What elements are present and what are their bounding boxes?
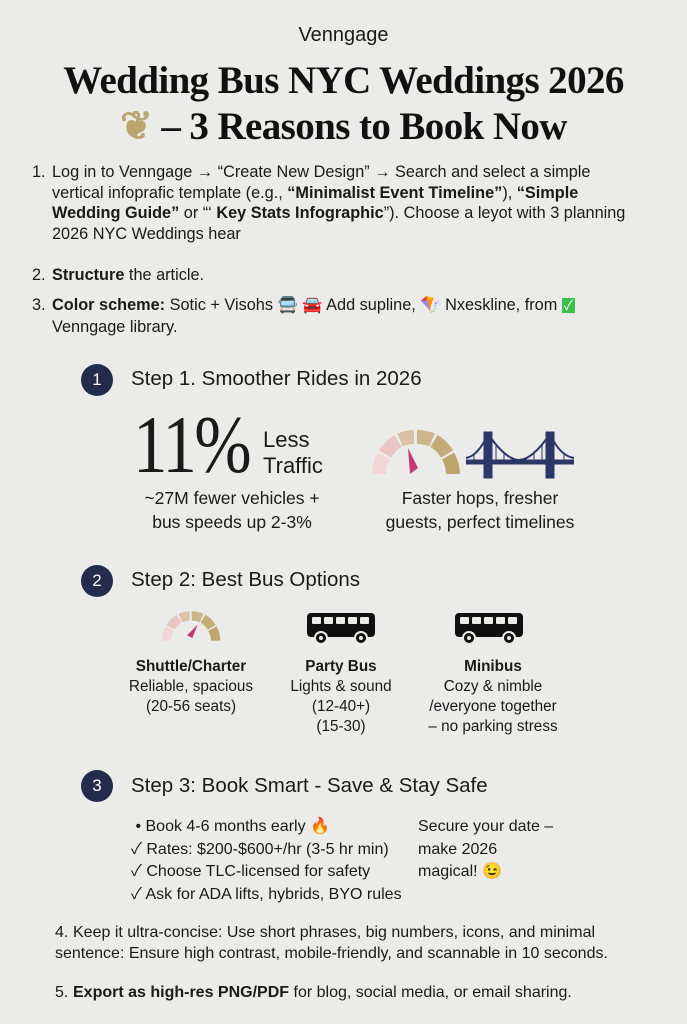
- list item 1: Log in to Venngage → “Create New Design” → Search and select a simple: [52, 163, 590, 181]
- list item 1: vertical infoprafic template (e.g., “Minimalist Event Timeline”), “Simple: [52, 184, 578, 202]
- list item 3: Color scheme: Sotic + Visohs 🚍 🚘 Add supline, 🪁 Nxeskline, from ✓: [52, 296, 573, 314]
- icon: minibus: [455, 613, 523, 643]
- title: Wedding Bus NYC Weddings 2026: [63, 59, 624, 102]
- text: 3.: [32, 296, 46, 314]
- list item 3: [32, 296, 575, 336]
- checklist: ✓ Choose TLC-licensed for safety: [131, 863, 370, 880]
- option: party bus: Party Bus: [305, 658, 377, 675]
- list item 3: Venngage library.: [52, 318, 178, 336]
- bridge caption: Faster hops, fresher: [402, 488, 558, 508]
- step 1 heading: Step 1. Smoother Rides in 2026: [131, 367, 422, 390]
- icon: bridge: [466, 432, 574, 478]
- list item 4: Keep it ultra-concise: Use short phrases, big numbers, icons, and minimal: [73, 924, 595, 941]
- callout: Secure your date –: [418, 818, 553, 835]
- big stat 11%: 11%: [133, 399, 249, 490]
- title: [63, 59, 624, 148]
- list item 4: 4.: [55, 924, 68, 941]
- checklist: • Book 4-6 months early 🔥: [135, 818, 330, 835]
- stat caption: ~27M fewer vehicles +: [144, 488, 320, 508]
- checklist: [131, 816, 402, 902]
- bridge caption: guests, perfect timelines: [386, 512, 574, 532]
- icon: small gauge: [162, 611, 220, 641]
- option: shuttle: [129, 658, 253, 715]
- list item 2: Structure the article.: [52, 266, 204, 284]
- text: 2.: [32, 266, 46, 284]
- step 2 badge: 2: [92, 571, 102, 590]
- step 2 badge: [81, 565, 113, 597]
- step 3 badge: 3: [92, 776, 102, 795]
- option: party bus: (12-40+): [312, 698, 370, 715]
- option: minibus: [428, 658, 558, 735]
- option: shuttle: Shuttle/Charter: [136, 658, 246, 675]
- step 3 badge: [81, 770, 113, 802]
- list item 1: [32, 163, 625, 243]
- stat label: Less: [263, 427, 309, 452]
- checklist: ✓ Ask for ADA lifts, hybrids, BYO rules: [131, 886, 402, 902]
- checklist: ✓ Rates: $200-$600+/hr (3-5 hr min): [131, 840, 389, 858]
- callout: make 2026: [418, 840, 497, 858]
- list item 1: 2026 NYC Weddings hear: [52, 225, 241, 243]
- option: shuttle: Reliable, spacious: [129, 678, 253, 695]
- brand: Venngage: [298, 24, 389, 46]
- step 1 badge: 1: [92, 370, 102, 389]
- text: 1.: [32, 163, 46, 181]
- list item 4: sentence: Ensure high contrast, mobile-friendly, and scannable in 10 seconds.: [55, 945, 608, 962]
- step 3 heading: Step 3: Book Smart - Save & Stay Safe: [131, 774, 488, 797]
- icon: party bus: [307, 613, 375, 643]
- option: party bus: Lights & sound: [290, 678, 392, 695]
- icon: gauge: [372, 430, 460, 474]
- callout: magical! 😉: [418, 863, 502, 880]
- option: shuttle: (20-56 seats): [146, 698, 236, 715]
- option: party bus: (15-30): [316, 718, 366, 735]
- stat caption: bus speeds up 2-3%: [152, 512, 312, 532]
- option: party bus: [290, 658, 392, 735]
- option: minibus: – no parking stress: [428, 718, 558, 735]
- callout: [418, 818, 554, 880]
- bridge caption: [386, 488, 574, 532]
- stat label: [263, 427, 323, 478]
- step 2 heading: Step 2: Best Bus Options: [131, 568, 360, 591]
- stat caption: [144, 488, 320, 532]
- stat label: Traffic: [263, 453, 323, 478]
- list item 5: Export as high-res PNG/PDF for blog, social media, or email sharing.: [73, 984, 572, 1001]
- option: minibus: Minibus: [464, 658, 522, 675]
- option: minibus: Cozy & nimble: [444, 678, 542, 695]
- option: minibus: /everyone together: [429, 698, 557, 715]
- title: ❦ – 3 Reasons to Book Now: [120, 105, 567, 148]
- list item 5: 5.: [55, 984, 68, 1001]
- step 1 badge: [81, 364, 113, 396]
- list item 1: Wedding Guide” or “‘ Key Stats Infographic”). Choose a leyot with 3 planning: [52, 204, 625, 222]
- list item 4: [55, 924, 608, 962]
